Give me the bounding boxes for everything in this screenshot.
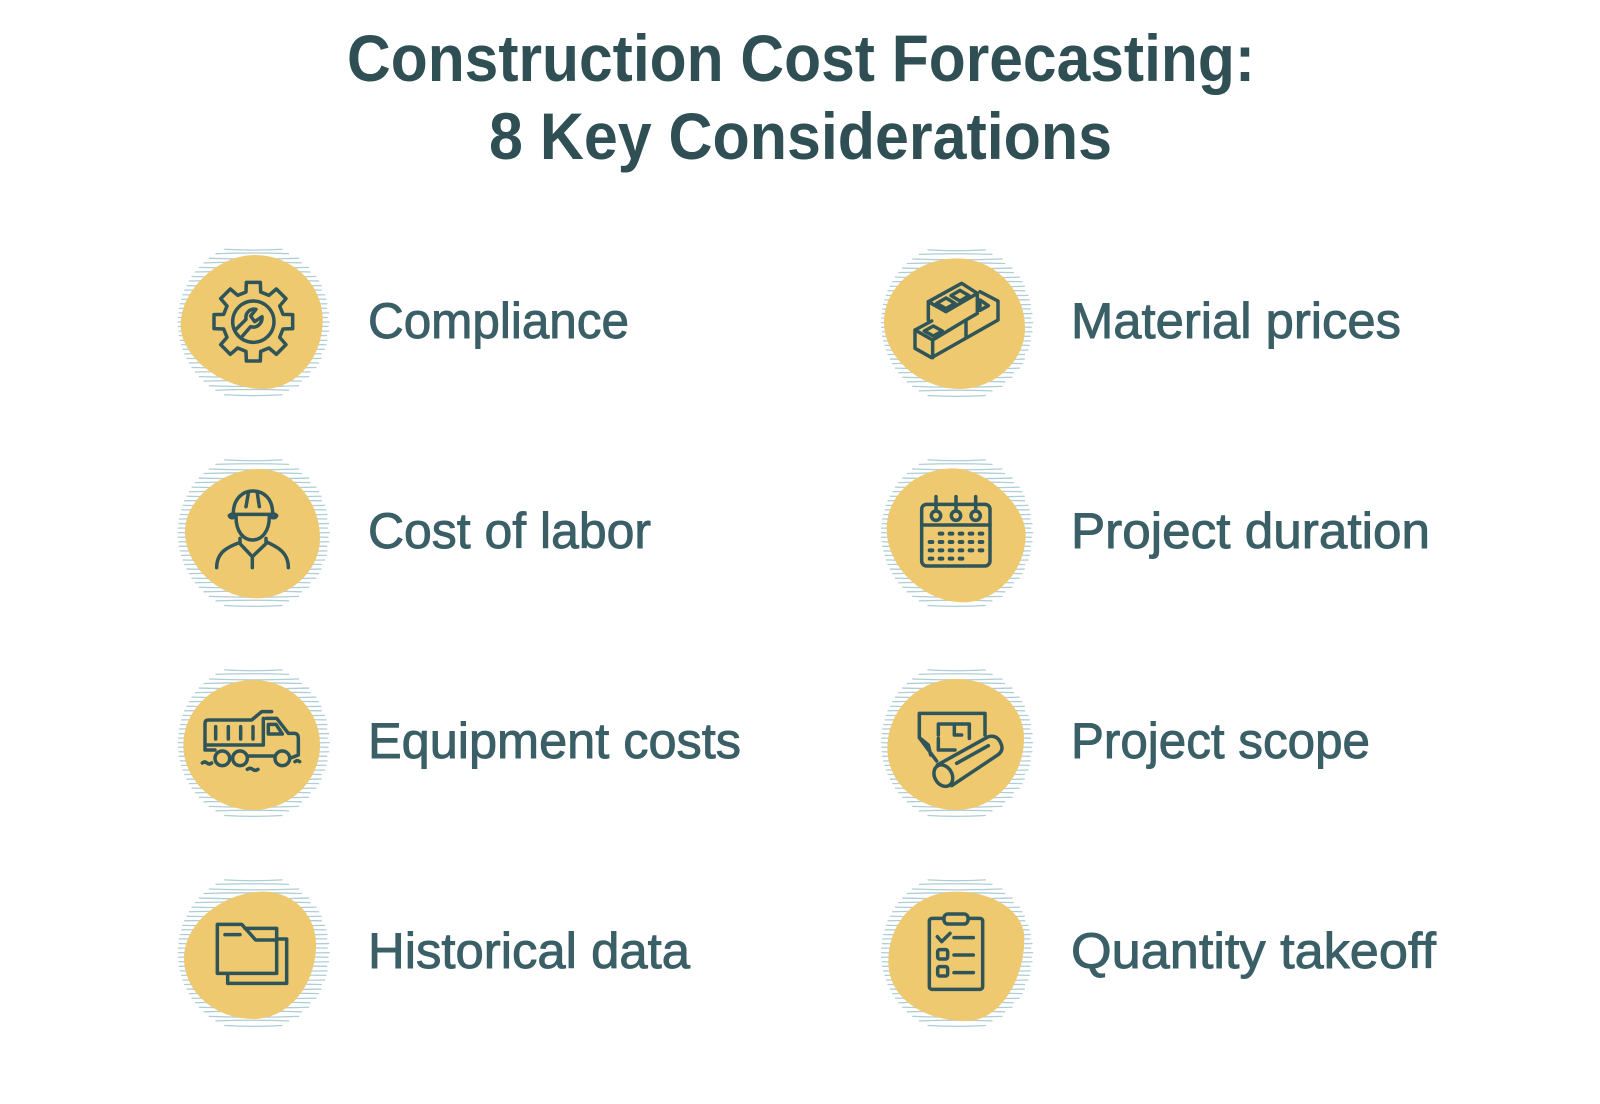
item: Equipment costs <box>178 670 741 816</box>
label: Quantity takeoff <box>1071 923 1436 979</box>
icon: blueprint roll <box>882 670 1033 816</box>
item: Cost of labor <box>178 460 651 606</box>
title: 8 Key Considerations <box>489 99 1112 173</box>
label: Cost of labor <box>368 503 651 559</box>
item: Historical data <box>178 880 690 1026</box>
label: Project scope <box>1071 713 1370 769</box>
title: Construction Cost Forecasting: <box>347 21 1255 95</box>
label: Equipment costs <box>368 713 741 769</box>
icon: dump truck <box>178 670 329 816</box>
icon: calendar <box>882 460 1033 606</box>
label: Compliance <box>368 293 629 349</box>
label: Material prices <box>1071 293 1401 349</box>
icon: clipboard checklist <box>882 880 1033 1026</box>
icon: folders <box>178 880 329 1026</box>
item: Material prices <box>882 250 1401 396</box>
icon: gear with wrench <box>178 249 329 396</box>
label: Project duration <box>1071 503 1430 559</box>
item: Compliance <box>178 249 629 396</box>
icon: bricks <box>882 250 1033 396</box>
item: Project scope <box>882 670 1370 816</box>
item: Project duration <box>882 460 1430 606</box>
icon: worker with hard hat <box>178 460 329 606</box>
item: Quantity takeoff <box>882 880 1436 1026</box>
label: Historical data <box>368 923 690 979</box>
title <box>347 21 1255 173</box>
